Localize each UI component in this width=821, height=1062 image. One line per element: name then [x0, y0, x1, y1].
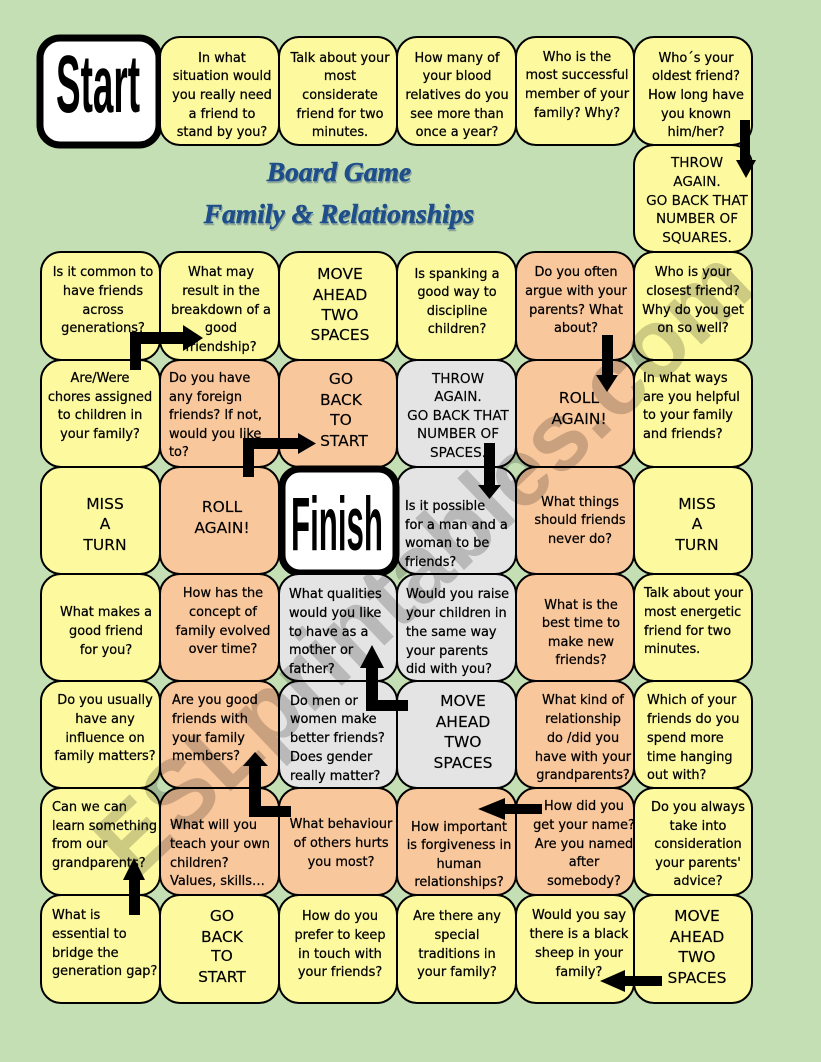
square: men or women: Do men or	[290, 694, 359, 709]
square: generation gap	[41, 895, 160, 1003]
square: go back to start: TO	[329, 411, 352, 429]
square: miss a turn left: TURN	[82, 536, 127, 554]
square: teach your children: Values, skills…	[170, 874, 265, 889]
square: mother or father	[279, 574, 397, 681]
square: chores: chores assigned	[48, 390, 152, 405]
square: foreign friends: friends? If not,	[169, 408, 262, 423]
square: parents advice: take into	[670, 819, 726, 834]
square: keep in touch: prefer to keep	[294, 928, 386, 943]
square: throw again squares: NUMBER OF	[656, 211, 738, 227]
square: energetic friend: most energetic	[644, 605, 741, 620]
square: foreign friends: would you like	[169, 427, 261, 442]
finish square	[282, 469, 396, 573]
square: throw again squares: THROW	[670, 155, 723, 171]
square: spanking: Is spanking a	[415, 267, 499, 282]
square: parents advice: Do you always	[651, 800, 745, 815]
square: oldest friend: him/her?	[668, 125, 724, 140]
square: black sheep: there is a black	[530, 927, 629, 942]
square: friends never do: should friends	[534, 513, 626, 528]
square: learn from grandparents: Can we can	[52, 800, 127, 815]
square: go back to start: GO	[329, 370, 353, 388]
square: blood relatives: your blood	[423, 69, 491, 84]
square: argue with parents: Do you often	[534, 265, 618, 280]
square: good friend: good friend	[69, 624, 143, 639]
square: grandparents relationship	[516, 681, 634, 788]
square: closest friend: Who is your	[655, 265, 732, 280]
square: across generations: generations?	[61, 321, 145, 336]
start square: Start	[56, 39, 140, 130]
arrow: spaces down	[478, 443, 501, 499]
square: new friends: What is the	[544, 598, 618, 613]
square: move ahead: MOVE	[317, 265, 363, 283]
square: miss a turn right	[634, 467, 752, 574]
square: family matters: influence on	[65, 731, 145, 746]
square: throw again squares: SQUARES.	[662, 230, 732, 246]
square: man and woman friends: friends?	[405, 555, 456, 570]
square: forgiveness: How important	[411, 820, 507, 835]
square: spanking: children?	[428, 322, 486, 337]
square: foreign friends: any foreign	[169, 390, 242, 405]
square: roll again middle	[160, 467, 279, 574]
square: throw again spaces	[397, 360, 516, 467]
square: your name: get your name?	[533, 818, 635, 833]
square: grandparents relationship: What kind of	[542, 693, 624, 708]
square: In what situation: situation would	[173, 69, 271, 84]
square: black sheep: Would you say	[532, 908, 626, 923]
square: parents advice: your parents'	[655, 856, 741, 871]
square: go back to start bottom: GO	[210, 907, 234, 925]
square: forgiveness	[397, 788, 516, 895]
square: move ahead	[279, 252, 397, 360]
square: spanking: discipline	[427, 304, 487, 319]
square: spend more time: friends do you	[647, 712, 739, 727]
square: move ahead gray: MOVE	[440, 692, 486, 710]
square: learn from grandparents: from our	[52, 837, 108, 852]
square: behaviour of others: of others hurts	[293, 836, 389, 851]
square: spend more time: out with?	[647, 768, 706, 783]
square: blood relatives	[397, 37, 516, 145]
square: across generations: across	[82, 303, 124, 318]
square: keep in touch: How do you	[302, 909, 378, 924]
square: spend more time	[634, 681, 752, 788]
square: behaviour of others: What behaviour	[290, 817, 393, 832]
square: special traditions: traditions in	[418, 947, 496, 962]
square: blood relatives: once a year?	[416, 125, 498, 140]
square: miss a turn right: MISS	[678, 495, 716, 513]
square: learn from grandparents: grandparents?	[52, 856, 146, 871]
text: Finish	[291, 482, 383, 567]
square: men or women	[279, 681, 397, 788]
square: men or women: Does gender	[290, 750, 373, 765]
square: move ahead: SPACES	[311, 326, 369, 344]
square: move ahead corner: SPACES	[668, 969, 726, 987]
square: mother or father: to have as a	[289, 625, 368, 640]
square: good friend: for you?	[80, 643, 132, 658]
square: family members	[160, 681, 279, 788]
square: energetic friend: friend for two	[644, 624, 731, 639]
square: mother or father: mother or	[289, 643, 354, 658]
square: In what situation: a friend to	[189, 107, 255, 122]
square: mother or father: would you like	[289, 606, 381, 621]
square: family matters: family matters?	[54, 749, 156, 764]
square: mother or father: father?	[289, 662, 335, 677]
square: breakdown of friendship	[160, 252, 279, 360]
square: your name	[516, 788, 635, 895]
arrow: behaviour to family members	[243, 752, 291, 817]
square: energetic friend: Talk about your	[643, 586, 744, 601]
square: black sheep: family?	[556, 965, 602, 980]
square: argue with parents: parents? What	[529, 303, 623, 318]
square: family members: your family	[172, 731, 245, 746]
square: special traditions: special	[435, 928, 479, 943]
square: chores: your family?	[60, 427, 140, 442]
square: spanking: good way to	[417, 285, 497, 300]
square: roll again middle: AGAIN!	[194, 519, 250, 537]
square: forgiveness: is forgiveness in	[407, 838, 511, 853]
square: go back to start: START	[320, 432, 368, 450]
square: move ahead corner: MOVE	[674, 907, 720, 925]
square: generation gap: essential to	[52, 927, 127, 942]
square: keep in touch: your friends?	[298, 965, 382, 980]
square: move ahead: TWO	[320, 306, 358, 324]
square: throw again spaces: SPACES.	[430, 445, 486, 461]
square: parents advice: advice?	[673, 874, 723, 889]
square: spanking	[397, 252, 516, 360]
square: concept of family	[160, 574, 279, 681]
square: generation gap: bridge the	[52, 946, 119, 961]
square: most successful	[516, 37, 634, 145]
square: most successful: Who is the	[543, 50, 611, 65]
square: oldest friend	[634, 37, 752, 145]
square: learn from grandparents: learn something	[52, 819, 157, 834]
arrow: foreign friends to start	[243, 433, 316, 477]
square: breakdown of friendship: result in the	[182, 284, 260, 299]
square: black sheep: sheep in your	[535, 946, 624, 961]
square: new friends: best time to	[542, 616, 620, 631]
square: behaviour of others	[279, 788, 397, 895]
square: foreign friends: to?	[169, 445, 189, 460]
square: spend more time: Which of your	[647, 693, 737, 708]
square: raise your children: your children in	[406, 606, 507, 621]
square: friends never do	[516, 467, 634, 574]
square: roll again	[516, 360, 634, 467]
square: helpful: are you helpful	[643, 390, 740, 405]
square: closest friend	[634, 252, 752, 360]
square: go back to start	[279, 360, 397, 467]
square: generation gap: generation gap?	[52, 964, 157, 979]
square: helpful	[634, 360, 752, 467]
square: teach your children: children?	[170, 856, 229, 871]
arrow: parents down	[596, 335, 618, 392]
square: most successful: most successful	[525, 68, 629, 83]
square: miss a turn left: A	[100, 515, 111, 533]
arrow: move ahead to black sheep	[600, 970, 662, 992]
square: breakdown of friendship: breakdown of a	[171, 303, 271, 318]
square: family members: Are you good	[172, 693, 258, 708]
square: grandparents relationship: have with your	[535, 750, 632, 765]
square: throw again spaces: AGAIN.	[434, 389, 482, 405]
arrow: oldest friend down	[736, 120, 756, 178]
square: black sheep	[516, 895, 634, 1003]
square: raise your children: the same way	[406, 625, 497, 640]
square: across generations: have friends	[63, 284, 143, 299]
square: closest friend: on so well?	[657, 321, 729, 336]
square: new friends	[516, 574, 634, 681]
square: helpful: In what ways	[643, 371, 728, 386]
square: special traditions	[397, 895, 516, 1003]
square: teach your children: teach your own	[170, 837, 270, 852]
square: grandparents relationship: do /did you	[547, 731, 619, 746]
square: generation gap: What is	[52, 908, 101, 923]
watermark: ESLprintables.com	[73, 226, 772, 898]
square: special traditions: your family?	[417, 965, 497, 980]
square: move ahead gray	[397, 681, 516, 788]
square: most successful: family? Why?	[534, 106, 620, 121]
square: considerate friend: minutes.	[312, 125, 368, 140]
square: oldest friend: Who´s your	[658, 51, 734, 66]
square: good friend	[41, 574, 160, 681]
title	[203, 156, 475, 231]
square: oldest friend: you known	[661, 107, 731, 122]
square: family members: members?	[172, 749, 240, 764]
square: go back to start bottom: START	[198, 968, 246, 986]
square: mother or father: What qualities	[289, 587, 382, 602]
square: throw again squares	[634, 145, 752, 252]
title: Board Game	[267, 158, 412, 189]
square: raise your children: did with you?	[406, 662, 492, 677]
square: grandparents relationship: grandparents?	[536, 768, 630, 783]
square: move ahead gray: AHEAD	[436, 713, 490, 731]
square: closest friend: Why do you get	[642, 303, 744, 318]
title: Family & Relationships	[203, 198, 474, 229]
square: argue with parents: about?	[554, 321, 598, 336]
square: move ahead corner: AHEAD	[670, 928, 724, 946]
square: argue with parents: argue with your	[525, 284, 628, 299]
square: family matters	[41, 681, 160, 788]
square: go back to start bottom: TO	[210, 947, 233, 965]
square: raise your children	[397, 574, 516, 681]
square: behaviour of others: you most?	[308, 855, 374, 870]
square: teach your children	[160, 788, 279, 895]
square: roll again middle: ROLL	[202, 498, 242, 516]
square: grandparents relationship: relationship	[545, 712, 621, 727]
square: concept of family: concept of	[189, 605, 257, 620]
square: go back to start bottom	[160, 895, 279, 1003]
square: your name: Are you named	[535, 837, 633, 852]
square: closest friend: closest friend?	[646, 284, 740, 299]
square: your name: after	[569, 855, 600, 870]
square: concept of family: family evolved	[176, 624, 270, 639]
square: throw again squares: AGAIN.	[673, 174, 721, 190]
arrow: move ahead to qualities	[360, 645, 408, 711]
square: helpful: to your family	[643, 408, 733, 423]
square: keep in touch: in touch with	[298, 947, 382, 962]
square: teach your children: What will you	[170, 818, 257, 833]
arrow: generation gap up	[123, 858, 145, 915]
square: raise your children: Would you raise	[406, 587, 509, 602]
square: across generations: Is it common to	[53, 265, 153, 280]
square: man and woman friends: for a man and a	[405, 518, 508, 533]
square: blood relatives: see more than	[410, 107, 504, 122]
square: blood relatives: How many of	[414, 51, 500, 66]
square: oldest friend: oldest friend?	[652, 69, 740, 84]
square: across generations	[41, 252, 160, 360]
square: miss a turn left	[41, 467, 160, 574]
square: concept of family: How has the	[183, 586, 263, 601]
square: friends never do: never do?	[548, 532, 612, 547]
square: miss a turn right: A	[692, 515, 703, 533]
square: family members: friends with	[172, 712, 248, 727]
square: throw again spaces: GO BACK THAT	[407, 408, 510, 424]
square: blood relatives: relatives do you	[405, 88, 509, 103]
square: breakdown of friendship: What may	[188, 265, 254, 280]
square: throw again spaces: NUMBER OF	[417, 426, 499, 442]
square: learn from grandparents	[41, 788, 160, 895]
square: forgiveness: relationships?	[414, 875, 504, 890]
square: chores: Are/Were	[71, 371, 130, 386]
title: Family & Relationships	[204, 200, 475, 231]
square: chores	[41, 360, 160, 467]
square: considerate friend	[279, 37, 397, 145]
square: men or women: really matter?	[290, 769, 380, 784]
square: men or women: better friends?	[290, 731, 385, 746]
square: In what situation: stand by you?	[177, 125, 267, 140]
square: forgiveness: human	[437, 857, 481, 872]
square: considerate friend: Talk about your	[289, 51, 390, 66]
square: men or women: women make	[290, 712, 377, 727]
square: new friends: friends?	[555, 653, 607, 668]
square: keep in touch	[279, 895, 397, 1003]
square: raise your children: your parents	[406, 644, 488, 659]
square: In what situation: you really need	[172, 88, 272, 103]
square: foreign friends: Do you have	[169, 371, 250, 386]
square: In what situation	[160, 37, 279, 145]
arrow: generations to friendship	[130, 325, 203, 370]
square: parents advice	[634, 788, 752, 895]
start square	[40, 38, 159, 145]
arrow: your name to forgiveness	[478, 798, 542, 820]
square: family matters: have any	[75, 712, 135, 727]
square: most successful: member of your	[525, 87, 630, 102]
square: throw again spaces: THROW	[431, 371, 484, 387]
square: move ahead: AHEAD	[313, 286, 367, 304]
square: go back to start: BACK	[320, 391, 363, 409]
square: move ahead gray: TWO	[444, 733, 482, 751]
square: chores: to children in	[58, 408, 142, 423]
square: friends never do: What things	[541, 495, 619, 510]
square: roll again: ROLL	[559, 389, 599, 407]
square: considerate friend: most	[324, 69, 356, 84]
square: energetic friend	[634, 574, 752, 681]
square: helpful: and friends?	[643, 427, 723, 442]
square: go back to start bottom: BACK	[201, 928, 244, 946]
square: move ahead gray: SPACES	[434, 754, 492, 772]
square: spend more time: time hanging	[647, 750, 733, 765]
square: breakdown of friendship: friendship?	[185, 340, 257, 355]
square: move ahead corner: TWO	[678, 948, 716, 966]
square: energetic friend: minutes.	[644, 642, 700, 657]
square: man and woman friends: Is it possible	[405, 499, 485, 514]
square: man and woman friends: woman to be	[405, 536, 489, 551]
square: good friend: What makes a	[60, 605, 152, 620]
square: spend more time: spend more	[647, 731, 724, 746]
square: oldest friend: How long have	[648, 88, 744, 103]
square: your name: How did you	[544, 799, 624, 814]
square: considerate friend: friend for two	[296, 107, 384, 122]
square: move ahead corner	[634, 895, 752, 1003]
square: considerate friend: considerate	[302, 88, 378, 103]
square: throw again squares: GO BACK THAT	[646, 193, 749, 209]
square: concept of family: over time?	[189, 642, 257, 657]
square: new friends: make new	[548, 635, 614, 650]
square: roll again: AGAIN!	[551, 410, 607, 428]
square: man and woman friends	[397, 467, 516, 574]
square: miss a turn left: MISS	[86, 495, 124, 513]
square: In what situation: In what	[198, 51, 246, 66]
square: your name: somebody?	[547, 874, 621, 889]
square: special traditions: Are there any	[413, 909, 501, 924]
square: miss a turn right: TURN	[674, 536, 719, 554]
square: breakdown of friendship: good	[205, 321, 237, 336]
title: Board Game	[266, 156, 411, 187]
square: parents advice: consideration	[654, 837, 742, 852]
square: family matters: Do you usually	[57, 693, 153, 708]
square: argue with parents	[516, 252, 634, 360]
square: foreign friends	[160, 360, 279, 467]
